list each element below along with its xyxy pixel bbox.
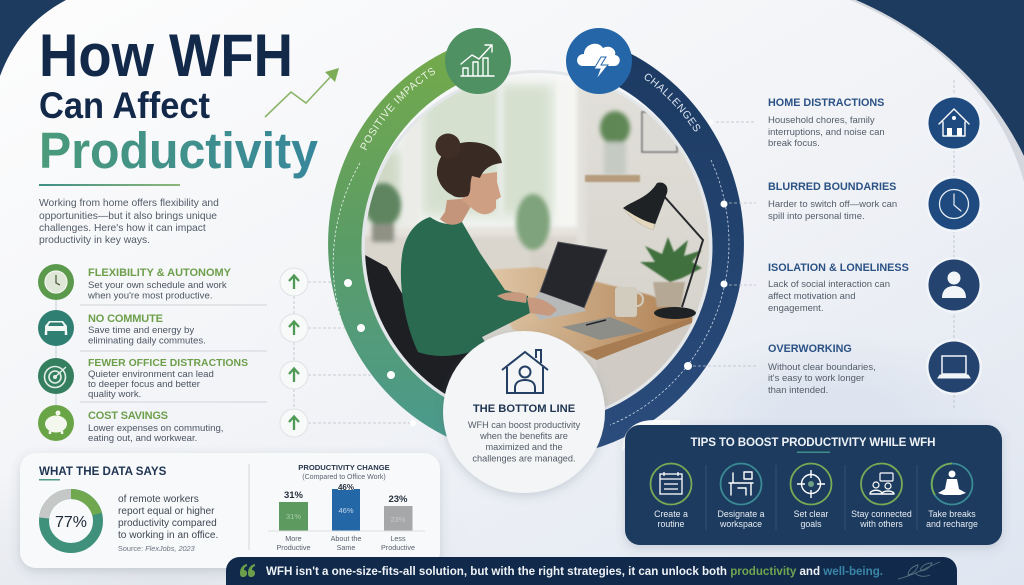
bar: more productive — [277, 490, 310, 552]
arrow: flexibility — [280, 268, 308, 296]
arrow: distractions — [280, 361, 308, 389]
arrow markers — [280, 268, 413, 437]
bar chart: productivity change: (Compared to Office Work) — [302, 474, 386, 481]
bar: more productive: 31% — [286, 512, 301, 521]
tip: designate a workspace: workspace — [719, 519, 762, 529]
item: no commute: eliminating daily commutes. — [88, 336, 206, 346]
item: home distractions — [768, 95, 982, 151]
item: no commute — [38, 310, 206, 346]
item: home distractions: break focus. — [768, 138, 820, 149]
ring: challenges: CHALLENGES — [644, 74, 700, 132]
donut chart: 77% — [44, 494, 98, 548]
item: overworking — [768, 339, 982, 396]
tip: stay connected: with others — [859, 519, 903, 529]
donut chart: 77%: 77% — [55, 514, 87, 531]
panel: the bottom line: maximized and the — [485, 442, 563, 452]
notebook — [562, 317, 645, 340]
bar: about the same: Same — [337, 543, 355, 552]
tip: stay connected: Stay connected — [851, 509, 912, 519]
bar chart: productivity change — [268, 463, 425, 552]
lamp — [623, 183, 703, 319]
title — [39, 22, 319, 179]
bar: about the same — [331, 483, 361, 552]
ring connectors and nodes — [333, 120, 756, 446]
statistic text — [118, 494, 218, 553]
item: cost savings — [38, 405, 223, 444]
bar: more productive: 31% — [284, 490, 304, 501]
intro text: opportunities—but it also brings unique — [39, 211, 217, 222]
panel: the bottom line: THE BOTTOM LINE — [473, 403, 576, 415]
item: isolation and loneliness: affect motivation and — [768, 291, 856, 302]
bar: about the same: About the — [331, 534, 361, 543]
panel: the bottom line: challenges are managed. — [472, 454, 576, 464]
icon: quote mark — [240, 564, 255, 577]
title: Productivity — [39, 122, 319, 179]
bar: more productive: Productive — [277, 543, 310, 552]
item: isolation and loneliness: Lack of social interaction can — [768, 279, 890, 290]
item: blurred boundaries: Harder to switch off—work can — [768, 199, 897, 210]
panel: tips: TIPS TO BOOST PRODUCTIVITY WHILE WFH — [690, 436, 936, 449]
intro text: Working from home offers flexibility and — [39, 198, 219, 209]
tip: designate a workspace: Designate a — [718, 509, 765, 519]
tip: designate a workspace — [718, 464, 765, 529]
desk — [483, 267, 692, 360]
item: no commute: Save time and energy by — [88, 325, 194, 336]
tip: take breaks — [926, 464, 978, 529]
panel: benefits list — [38, 264, 267, 444]
icon: positive impacts chart — [445, 28, 511, 94]
panel: the bottom line: when the benefits are — [479, 431, 568, 441]
item: overworking: OVERWORKING — [768, 343, 852, 355]
panel: what the data says: WHAT THE DATA SAYS — [39, 465, 167, 478]
bar: about the same: 46% — [338, 506, 354, 515]
arrow: commute — [280, 314, 308, 342]
photo: woman working at a laptop — [362, 70, 712, 424]
bar: less productive — [381, 494, 415, 552]
icon: leaf sprig — [898, 562, 940, 579]
item: blurred boundaries — [768, 176, 982, 232]
bar: less productive: Less — [390, 534, 406, 543]
panel: what the data says — [20, 453, 440, 568]
item: flexibility — [38, 264, 232, 302]
icon: challenges storm cloud — [566, 28, 632, 94]
item: cost savings: COST SAVINGS — [88, 410, 168, 422]
title: How WFH — [39, 22, 293, 89]
item: fewer office distractions: quality work. — [88, 389, 141, 400]
panel: the bottom line — [443, 331, 605, 493]
laptop — [528, 242, 607, 320]
statistic text: report equal or higher — [118, 506, 215, 517]
statistic text: of remote workers — [118, 494, 199, 505]
arrow: savings — [280, 409, 308, 437]
tip: stay connected — [851, 464, 912, 529]
plants — [367, 108, 633, 253]
intro text: challenges. Here's how it can impact — [39, 223, 206, 234]
item: isolation and loneliness: ISOLATION & LONELINESS — [768, 262, 909, 274]
bar: less productive: Productive — [381, 543, 415, 552]
title: Can Affect — [39, 85, 210, 126]
item: isolation and loneliness: engagement. — [768, 303, 823, 314]
tip: set clear goals: Set clear — [794, 509, 828, 519]
item: flexibility: FLEXIBILITY & AUTONOMY — [88, 267, 232, 279]
item: isolation and loneliness — [768, 257, 982, 314]
icon: house with person — [502, 350, 548, 393]
tip: set clear goals: goals — [800, 519, 822, 529]
item: cost savings: Lower expenses on commuting, — [88, 423, 223, 434]
item: fewer office distractions: to deeper focus and better — [88, 379, 201, 390]
ring: challenges — [596, 54, 744, 448]
intro text — [39, 184, 219, 246]
tip: set clear goals — [790, 464, 832, 529]
item: flexibility: when you're most productive. — [87, 290, 212, 302]
woman — [401, 134, 557, 356]
chair and lower body — [365, 255, 470, 394]
item: home distractions: interruptions, and noise can — [768, 127, 885, 138]
statistic text: Source: FlexJobs, 2023 — [118, 544, 195, 553]
item: overworking: it's easy to work longer — [768, 373, 864, 384]
item: flexibility: Set your own schedule and work — [88, 280, 227, 291]
item: no commute: NO COMMUTE — [88, 313, 163, 325]
plant on desk — [640, 237, 702, 307]
bar: less productive: 23% — [390, 515, 406, 524]
quote bar — [226, 557, 957, 585]
statistic text: to working in an office. — [118, 530, 218, 541]
item: home distractions: HOME DISTRACTIONS — [768, 97, 884, 109]
tip: create a routine: Create a — [654, 509, 688, 519]
bar: more productive: More — [285, 534, 302, 543]
ring: positive impacts — [328, 50, 456, 437]
intro text: productivity in key ways. — [39, 235, 150, 246]
item: fewer office distractions — [38, 358, 248, 400]
tip: take breaks: and recharge — [926, 519, 978, 529]
item: overworking: than intended. — [768, 385, 828, 396]
mug — [615, 287, 643, 317]
panel: tips — [622, 420, 1002, 545]
item: overworking: Without clear boundaries, — [768, 362, 876, 373]
item: blurred boundaries: BLURRED BOUNDARIES — [768, 181, 896, 193]
bar chart: productivity change: PRODUCTIVITY CHANGE — [298, 463, 390, 472]
item: home distractions: Household chores, family — [768, 115, 875, 126]
icon: trend arrow — [265, 68, 339, 117]
tip: create a routine — [650, 464, 692, 529]
bar: about the same: 46% — [338, 483, 354, 492]
tip: create a routine: routine — [658, 519, 685, 529]
item: cost savings: eating out, and workwear. — [88, 433, 197, 444]
item: fewer office distractions: FEWER OFFICE DISTRACTIONS — [88, 358, 248, 369]
bar: less productive: 23% — [388, 494, 408, 505]
panel: the bottom line: WFH can boost productivity — [468, 420, 581, 430]
quote bar: WFH isn't a one-size-fits-all solution, but with the right strategies, it can unlock both productivity and well-being. — [266, 565, 883, 578]
ring: positive impacts: POSITIVE IMPACTS — [360, 68, 436, 150]
item: fewer office distractions: Quieter environment can lead — [88, 369, 214, 380]
statistic text: productivity compared — [118, 518, 217, 529]
item: blurred boundaries: spill into personal time. — [768, 211, 865, 222]
tip: take breaks: Take breaks — [928, 509, 976, 519]
panel: challenges list — [768, 80, 982, 410]
